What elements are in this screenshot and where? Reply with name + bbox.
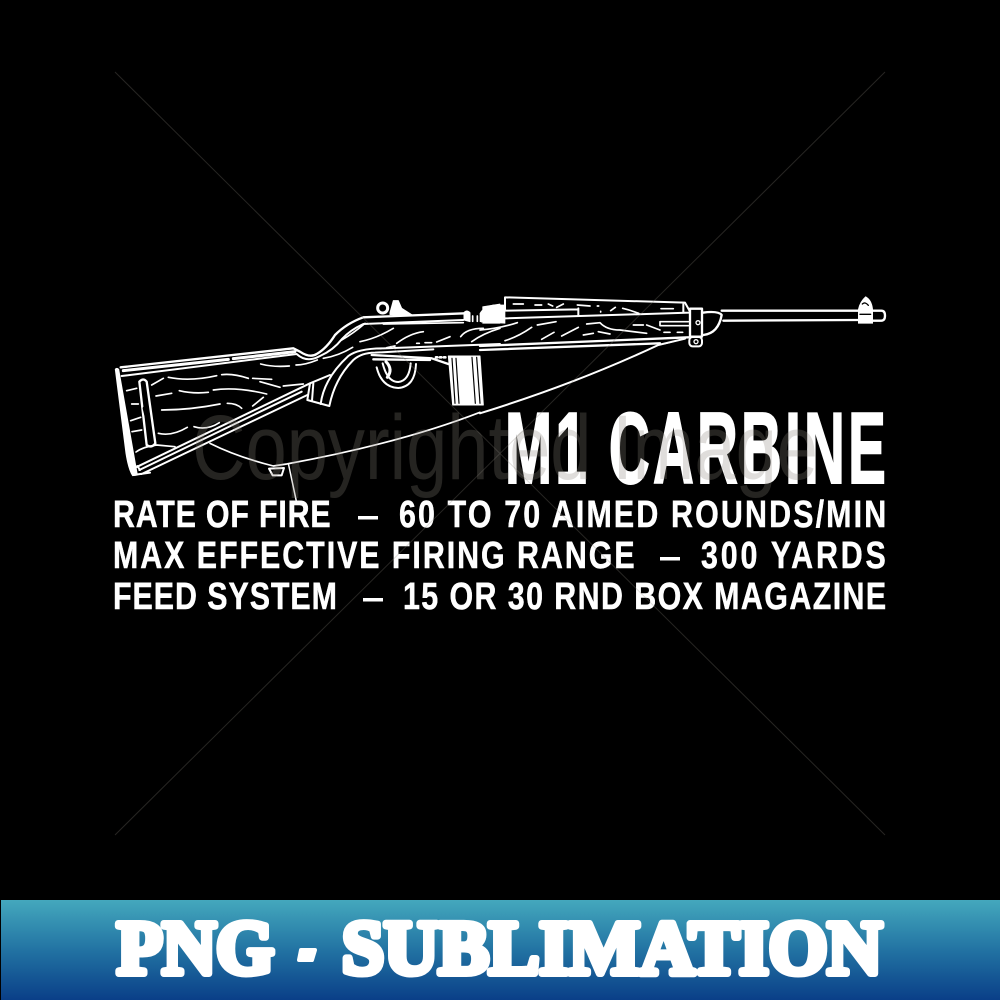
spec line: max effective firing range: MAX EFFECTIVE FIRING RANGE — [113, 535, 635, 577]
banner text: PNG — [117, 906, 274, 990]
illustration: M1 carbine rifle line drawing — [115, 297, 885, 503]
spec line: feed system — [113, 576, 886, 618]
watermark: faint diagonal cross lines — [115, 72, 885, 835]
spec line: rate of fire: 60 TO 70 AIMED ROUNDS/MIN — [399, 494, 886, 536]
rifle rear section: stock, receiver, trigger and magazine — [115, 301, 500, 503]
banner text: SUBLIMATION — [342, 906, 882, 990]
title: M1 CARBINE: M1 CARBINE — [505, 393, 886, 505]
carrying sling — [210, 412, 480, 466]
spec line: feed system: FEED SYSTEM — [113, 576, 337, 618]
specifications text block — [113, 494, 886, 618]
spec line: max effective firing range: 300 YARDS — [701, 535, 886, 577]
spec line: feed system: 15 OR 30 RND BOX MAGAZINE — [403, 576, 886, 618]
wood grain on the stock — [127, 328, 500, 452]
banner: PNG - SUBLIMATION — [1, 900, 1000, 1000]
spec line: rate of fire: RATE OF FIRE — [113, 494, 331, 536]
spec line: max effective firing range — [113, 535, 886, 577]
watermark: Copyrighted Image: Copyrighted Image — [192, 397, 818, 499]
handguard wood grain — [480, 304, 683, 341]
spec line: rate of fire — [113, 494, 886, 536]
rifle front section: handguard, barrel band, barrel and front sight — [480, 297, 885, 413]
